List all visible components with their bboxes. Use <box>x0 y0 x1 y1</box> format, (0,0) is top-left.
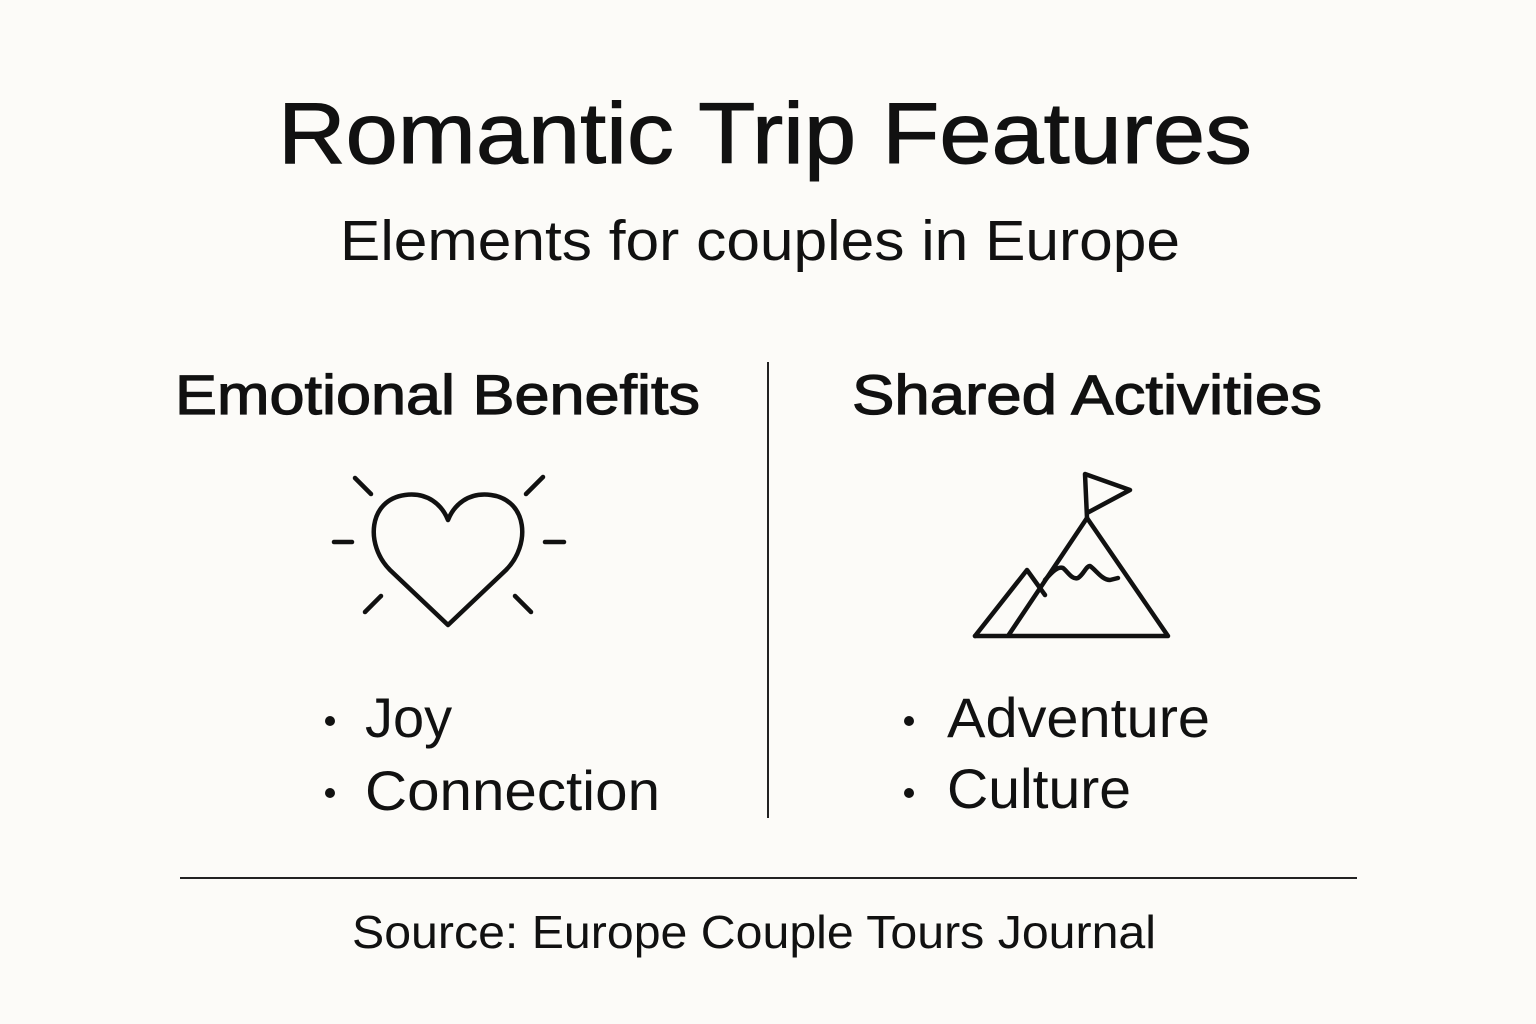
list: emotional benefits: Connection <box>365 759 660 822</box>
list: shared activities <box>904 686 1210 820</box>
heading: Emotional Benefits: Emotional Benefits <box>175 363 700 426</box>
list: shared activities: Culture <box>947 757 1131 820</box>
subtitle: Elements for couples in Europe <box>340 209 1180 273</box>
list: emotional benefits <box>325 686 660 822</box>
icon: mountain with flag <box>975 474 1168 636</box>
icon: heart with rays <box>334 477 564 625</box>
source: Source: Europe Couple Tours Journal <box>352 906 1156 958</box>
list: emotional benefits: Joy <box>365 686 452 749</box>
title: Romantic Trip Features <box>278 86 1252 182</box>
heading: Shared Activities: Shared Activities <box>852 363 1322 426</box>
list: shared activities: Adventure <box>947 686 1210 749</box>
